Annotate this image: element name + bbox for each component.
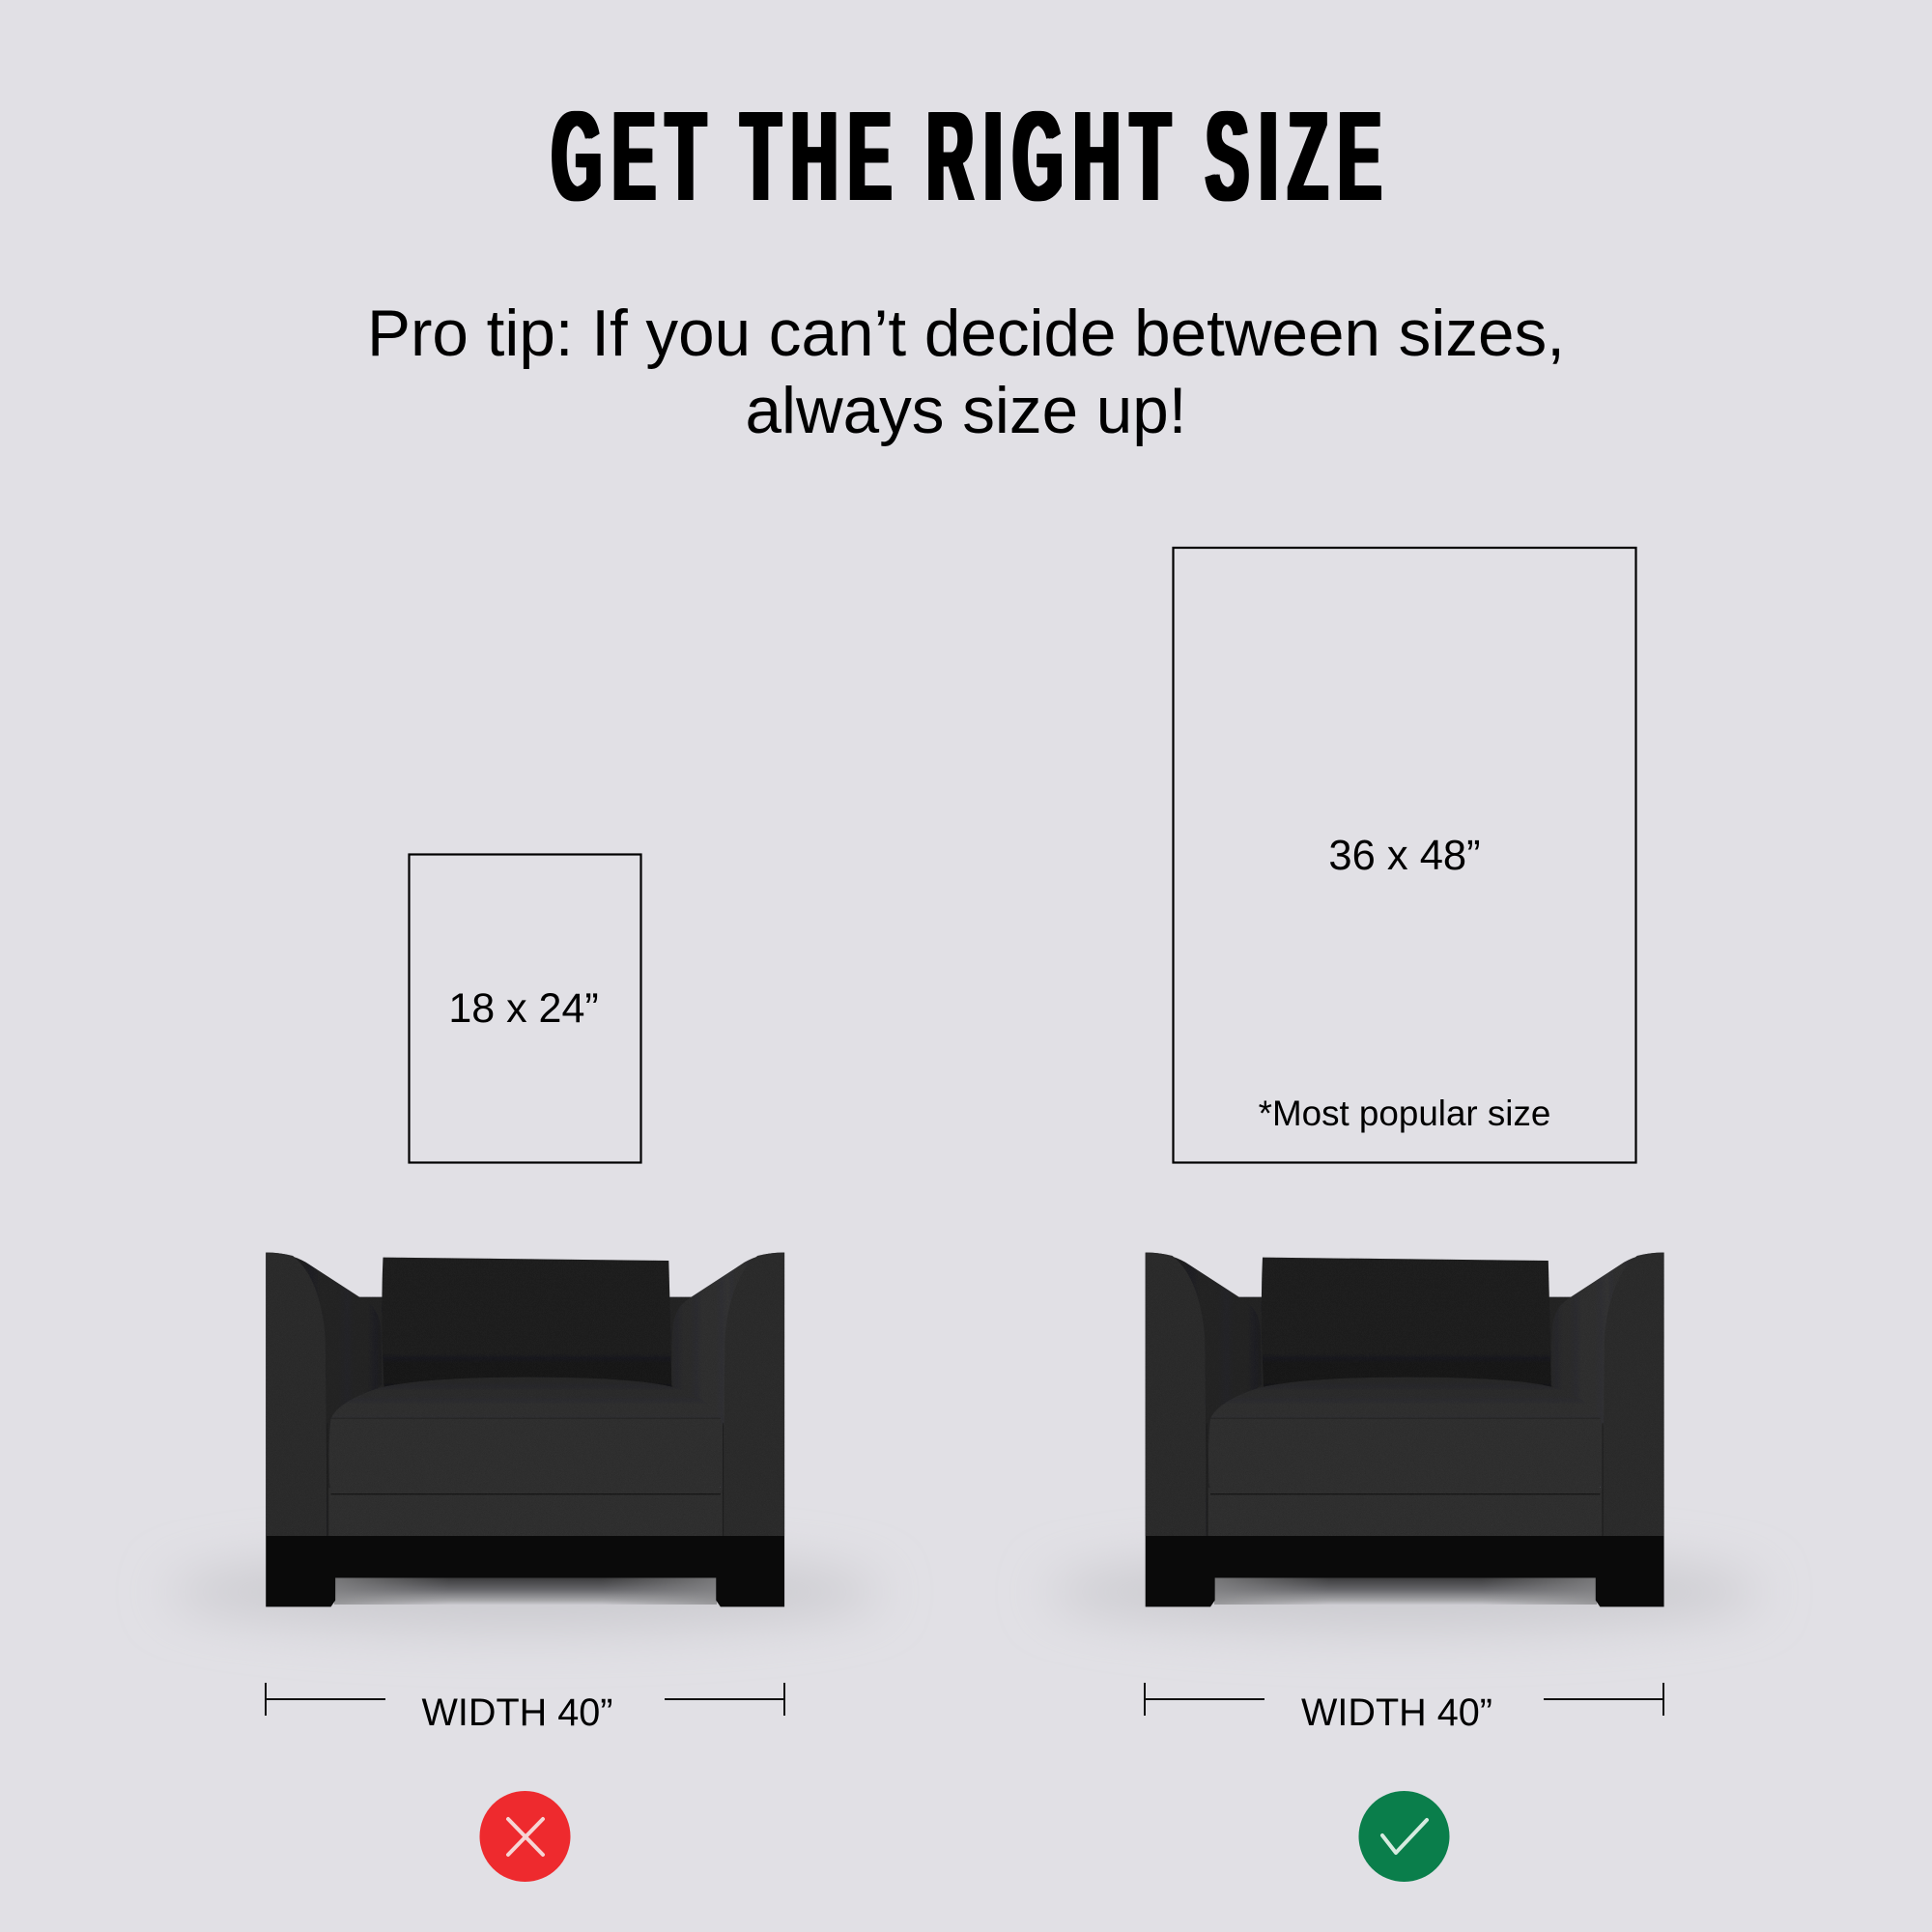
width label right: WIDTH 40”	[1301, 1691, 1492, 1734]
most popular size note: *Most popular size	[1259, 1094, 1550, 1133]
width dimension left	[266, 1683, 784, 1734]
small art frame 18 x 24	[410, 854, 641, 1163]
armchair left	[266, 1253, 784, 1606]
width dimension right	[1145, 1683, 1663, 1734]
armchair right	[1146, 1253, 1664, 1606]
floor shadow: left chair	[167, 1555, 882, 1629]
icon: green check	[1358, 1791, 1449, 1882]
width label left: WIDTH 40”	[422, 1691, 612, 1734]
pro tip text	[367, 298, 1565, 447]
pro tip text: always size up!	[746, 375, 1186, 447]
pro tip text: Pro tip: If you can’t decide between sizes,	[367, 298, 1565, 370]
title: GET THE RIGHT SIZE	[552, 85, 1392, 227]
icon: red cross	[479, 1791, 570, 1882]
size label 18 x 24: 18 x 24”	[448, 985, 599, 1032]
large art frame 36 x 48	[1173, 548, 1636, 1163]
floor shadow: right chair	[1047, 1555, 1762, 1629]
size label 36 x 48: 36 x 48”	[1328, 833, 1481, 879]
